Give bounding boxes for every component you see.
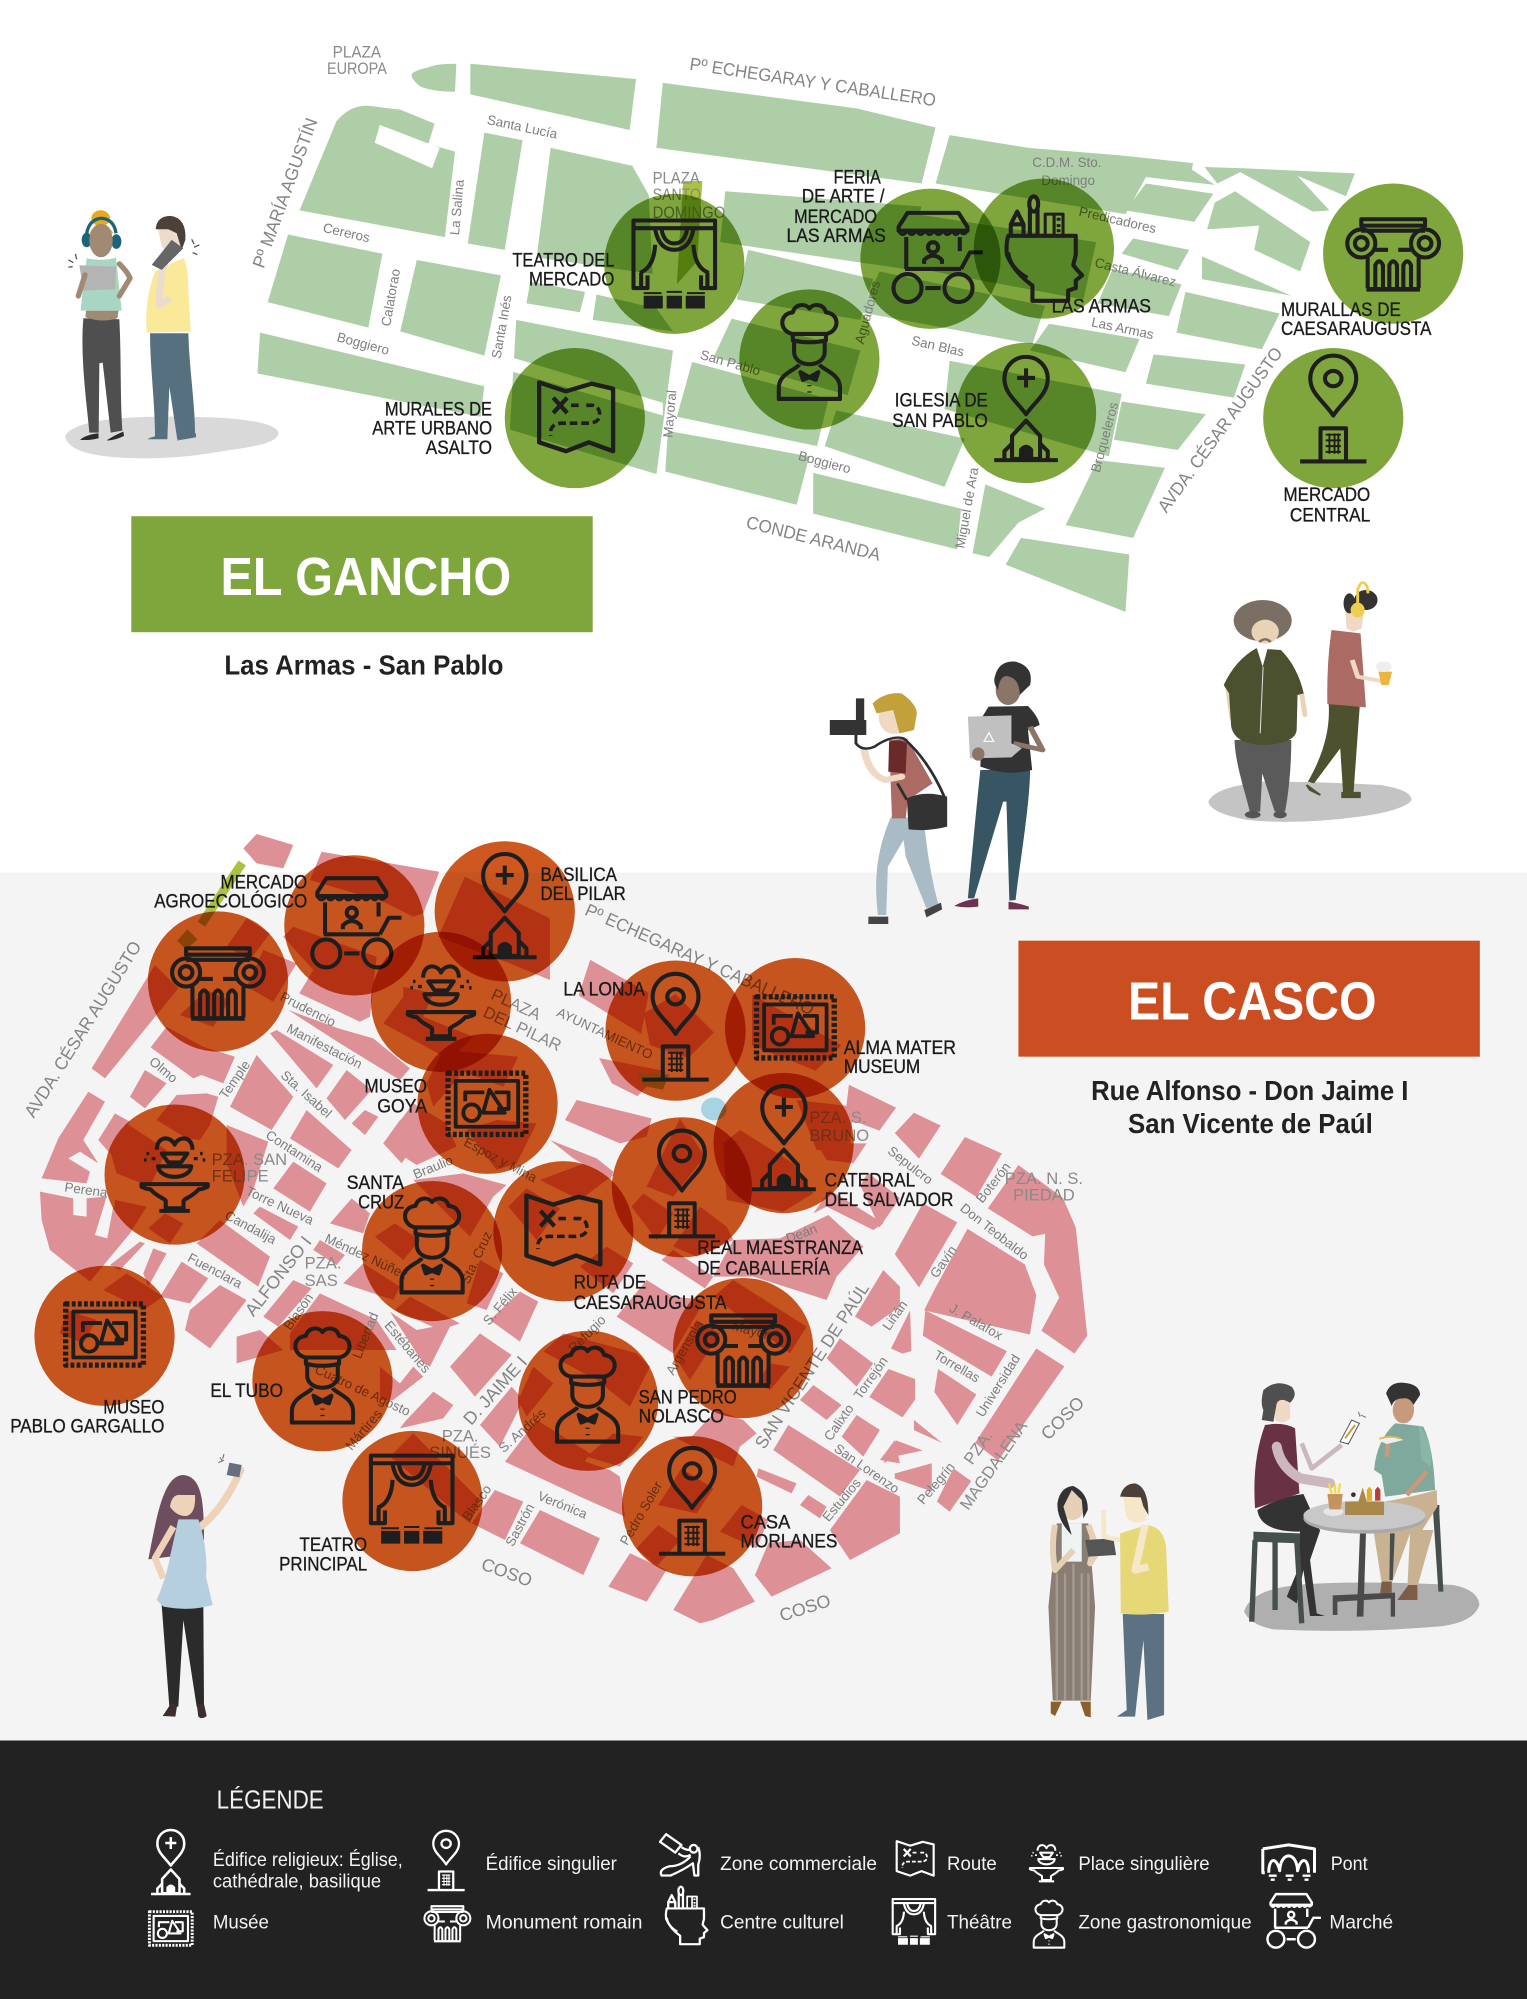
street labels: El Casco: PZA.	[442, 1427, 479, 1446]
illustration: two people eating at a table	[1244, 1383, 1479, 1631]
street labels: El Casco: Deán	[784, 1221, 819, 1246]
street labels: El Casco: S. Félix	[480, 1284, 520, 1328]
legend: religious building: cathédrale, basilique	[213, 1871, 381, 1893]
marker: Mercado Central	[1263, 348, 1403, 488]
labels: El Casco: DEL PILAR	[540, 884, 626, 905]
street labels: El Gancho: San Blas	[910, 333, 966, 360]
labels: El Casco: GOYA	[377, 1097, 427, 1118]
map: El Gancho plaza accent	[677, 181, 702, 284]
street labels: El Casco: Pedro Soler	[617, 1478, 665, 1548]
labels: El Casco: LA LONJA	[563, 979, 645, 1000]
labels: El Casco: CAESARAUGUSTA	[574, 1293, 727, 1314]
street labels: El Casco: PIEDAD	[1013, 1186, 1075, 1205]
labels: El Casco: CASA	[741, 1512, 791, 1533]
marker: Teatro Principal	[342, 1431, 483, 1571]
map: El Casco blocks, north-west	[40, 834, 550, 1363]
street labels: El Casco: Argensola	[663, 1317, 706, 1377]
street labels: El Gancho: Broqueleros	[1088, 400, 1121, 474]
marker: Basilica del Pilar	[435, 841, 575, 981]
marker: Alma Mater Museum	[725, 958, 865, 1098]
legend: singular building: Édifice singulier	[486, 1852, 617, 1875]
legend: theatre	[893, 1899, 1012, 1945]
labels: El Gancho: MURALES DE	[385, 400, 492, 421]
labels: El Casco: REAL MAESTRANZA	[697, 1238, 863, 1259]
street labels: El Casco: SINUÉS	[429, 1443, 491, 1462]
street labels: El Casco	[20, 900, 1088, 1626]
street labels: El Casco: FELIPE	[212, 1167, 269, 1186]
street labels: El Casco: Torre Nueva	[244, 1183, 316, 1228]
street labels: El Casco: Verónica	[536, 1488, 590, 1522]
marker: San Pedro Nolasco chef	[518, 1331, 658, 1471]
street labels: El Gancho: Pº ECHEGARAY Y CABALLERO	[688, 54, 937, 110]
marker: Iglesia de San Pablo	[956, 343, 1096, 483]
marker: La Lonja	[605, 961, 746, 1101]
street labels: El Casco: Pº ECHEGARAY Y CABALLERO	[582, 900, 817, 1019]
legend: singular building	[428, 1831, 617, 1890]
legend: roman monument	[424, 1906, 642, 1941]
title box: El Casco	[1018, 941, 1480, 1057]
title box: El Gancho	[131, 516, 593, 632]
street labels: El Casco: D. JAIME I	[459, 1352, 531, 1429]
marker: Plaza San Felipe fountain	[105, 1104, 245, 1245]
street labels: El Casco: BRUNO	[809, 1126, 869, 1145]
marker: Casa Morlanes	[622, 1436, 762, 1576]
marker: Santa Cruz chef	[362, 1181, 502, 1321]
street labels: El Gancho: PLAZA	[333, 42, 382, 61]
street labels: El Casco: Estébanes	[381, 1318, 434, 1376]
map: El Gancho white street cuts	[375, 125, 663, 416]
street labels: El Gancho: Aguadores	[852, 279, 883, 346]
street labels: El Casco: PZA. S.	[809, 1108, 866, 1127]
legend: route: Route	[947, 1853, 997, 1875]
street labels: El Gancho: Domingo	[1041, 173, 1095, 188]
street labels: El Gancho: CONDE ARANDA	[744, 512, 883, 565]
street labels: El Casco: Universidad	[973, 1352, 1023, 1420]
labels: El Casco: BASILICA	[540, 865, 617, 886]
marker: Mercado Agroecológico column	[148, 911, 288, 1052]
street labels: El Casco: J. Palafox	[947, 1301, 1006, 1343]
illustration: person with laptop	[954, 662, 1043, 909]
legend: roman monument: Monument romain	[486, 1912, 642, 1934]
street labels: El Casco: Sepulcro	[885, 1143, 936, 1187]
labels: El Casco: DE CABALLERÍA	[697, 1259, 830, 1280]
labels: El Casco: ALMA MATER	[844, 1038, 956, 1059]
street labels: El Casco: PZA. SAN	[212, 1150, 287, 1169]
street labels: El Casco: Perena	[64, 1179, 109, 1200]
street labels: El Gancho: Santa Lucía	[486, 112, 559, 142]
marker: Museo Pablo Gargallo	[34, 1266, 175, 1406]
street labels: El Casco: S. Andrés	[496, 1405, 549, 1456]
marker: Murallas de Caesaraugusta	[1323, 184, 1463, 324]
labels: El Casco: CATEDRAL	[825, 1171, 915, 1192]
marker: El Tubo chef	[252, 1311, 393, 1451]
street labels: El Casco: Méndez Núñez	[323, 1231, 411, 1282]
street labels: El Casco: AVDA. CÉSAR AUGUSTO	[20, 937, 145, 1121]
street labels: El Casco: Boterón	[973, 1160, 1014, 1206]
marker: Teatro del Mercado	[604, 194, 744, 334]
street labels: El Casco: Blasco	[459, 1482, 495, 1524]
street labels: El Casco: Blasón	[281, 1291, 316, 1333]
marker: Real Maestranza	[612, 1117, 752, 1257]
legend: market	[1267, 1894, 1393, 1948]
street labels: El Casco: Gavín	[927, 1243, 960, 1281]
street labels: El Casco: Mártires	[342, 1406, 385, 1453]
labels: El Casco: CRUZ	[358, 1192, 404, 1213]
labels: El Gancho: TEATRO DEL	[512, 250, 614, 271]
labels: El Casco: RUTA DE	[574, 1273, 646, 1294]
labels: El Gancho: FERIA	[834, 168, 881, 189]
labels: El Casco: MUSEO	[103, 1398, 164, 1419]
map: El Casco blocks, south-east	[380, 1100, 900, 1623]
labels: El Casco: EL TUBO	[210, 1381, 283, 1402]
street labels: El Gancho: Boggiero	[797, 448, 852, 476]
street labels: El Gancho: Predicadores	[1077, 204, 1158, 236]
subtitle: El Gancho: Las Armas - San Pablo	[224, 649, 503, 680]
legend: route	[897, 1841, 997, 1876]
street labels: El Casco: Torrejón	[851, 1354, 891, 1402]
labels: El Casco: MUSEUM	[844, 1057, 920, 1078]
street labels: El Gancho: Casta Álvarez	[1093, 255, 1178, 290]
labels: El Gancho: LAS ARMAS	[786, 226, 886, 247]
map: El Casco plaza accents	[177, 863, 727, 1120]
street labels: El Gancho: EUROPA	[327, 59, 388, 78]
labels: El Gancho: DE ARTE /	[802, 187, 885, 208]
street labels: El Gancho: Calatorao	[378, 268, 403, 327]
labels: El Gancho: MERCADO	[529, 270, 614, 291]
street labels: El Casco: Candalija	[223, 1208, 279, 1247]
street labels: El Casco: Pelegrín	[914, 1459, 958, 1507]
street labels: El Casco: Calixto	[821, 1401, 857, 1444]
street labels: El Casco: Don Teobaldo	[957, 1200, 1031, 1263]
street labels: El Casco: Refugio	[565, 1312, 609, 1356]
street labels: El Casco: Liñán	[879, 1298, 910, 1333]
street labels: El Casco: PLAZA	[488, 985, 545, 1025]
street labels: El Gancho: Boggiero	[335, 329, 391, 358]
street labels: El Gancho: PLAZA	[653, 169, 701, 188]
street labels: El Casco: Torrellas	[931, 1347, 983, 1386]
street labels: El Gancho: La Salina	[447, 178, 467, 236]
labels: El Casco: SANTA	[347, 1173, 404, 1194]
marker: Roman column	[673, 1278, 813, 1418]
illustration: two people with tablet and phone	[65, 210, 278, 458]
street labels: El Casco: Fuenclara	[185, 1250, 245, 1291]
street labels: El Gancho: San Pablo	[699, 347, 762, 378]
street labels: El Casco: Manifestación	[284, 1021, 365, 1072]
marker: Plaza del Pilar fountain	[371, 932, 511, 1072]
labels: El Gancho: MERCADO	[794, 207, 877, 228]
street labels: El Casco: Sastrón	[502, 1501, 537, 1549]
street labels: El Casco: Braulio	[411, 1152, 455, 1182]
legend: singular square: Place singulière	[1078, 1853, 1210, 1875]
map: El Gancho street blocks	[257, 64, 1355, 612]
title box: El Casco: EL CASCO	[1128, 973, 1377, 1032]
street labels: El Gancho: C.D.M. Sto.	[1032, 155, 1101, 170]
street labels: El Gancho	[249, 42, 1287, 565]
street labels: El Casco: Mayor	[731, 1318, 771, 1342]
marker: Las Armas	[974, 178, 1114, 319]
street labels: El Casco: Espoz y Mina	[462, 1134, 540, 1185]
labels: El Gancho: CENTRAL	[1290, 505, 1370, 526]
labels: El Gancho: ARTE URBANO	[372, 419, 492, 440]
legend: market: Marché	[1329, 1912, 1393, 1934]
legend: cultural centre: Centre culturel	[720, 1912, 844, 1934]
legend: religious building: Édifice religieux: Église,	[213, 1848, 403, 1871]
subtitle: El Casco	[1091, 1075, 1408, 1139]
labels: El Gancho: IGLESIA DE	[895, 391, 988, 412]
subtitle: El Casco: San Vicente de Paúl	[1128, 1108, 1373, 1139]
street labels: El Casco: Prudencio	[278, 989, 338, 1030]
labels: El Casco	[10, 865, 956, 1575]
street labels: El Casco: Sta. Isabel	[278, 1067, 335, 1121]
title box: El Gancho: EL GANCHO	[221, 548, 511, 607]
street labels: El Gancho: Santa Inés	[489, 294, 515, 360]
street labels: El Gancho: SANTO	[653, 185, 701, 204]
street labels: El Casco: SAN VICENTE DE PAÚL	[750, 1278, 873, 1452]
street labels: El Casco: ALFONSO I	[241, 1232, 316, 1320]
legend: museum	[149, 1912, 269, 1945]
legend: religious building	[151, 1830, 403, 1894]
map: El Casco blocks, east	[579, 960, 1087, 1512]
street labels: El Casco: PZA.	[960, 1427, 997, 1468]
legend: museum: Musée	[213, 1912, 269, 1934]
street labels: El Casco: MAGDALENA	[956, 1416, 1032, 1513]
street labels: El Casco: Cuatro de Agosto	[313, 1362, 413, 1419]
legend: heading: LÉGENDE	[217, 1786, 324, 1815]
street labels: El Gancho: Las Armas	[1090, 314, 1155, 342]
labels: El Gancho	[372, 168, 1432, 526]
legend: singular square	[1030, 1845, 1210, 1881]
legend: gastronomy	[1033, 1901, 1252, 1948]
street labels: El Gancho: Cereros	[322, 220, 372, 245]
illustration: woman taking a selfie	[148, 1454, 242, 1718]
illustration: photographer	[830, 693, 947, 924]
labels: El Casco: TEATRO	[300, 1535, 367, 1556]
street labels: El Casco: PZA.	[305, 1253, 341, 1272]
street labels: El Casco: Sta. Cruz	[458, 1229, 495, 1286]
street labels: El Gancho: Pº MARÍA AGUSTÍN	[249, 115, 321, 271]
labels: El Casco: NOLASCO	[639, 1406, 724, 1427]
labels: El Casco: MORLANES	[741, 1531, 837, 1552]
marker: Murales	[505, 348, 645, 488]
street labels: El Gancho: AVDA. CÉSAR AUGUSTO	[1154, 343, 1287, 516]
street labels: El Casco: Olmo	[146, 1054, 181, 1086]
street labels: El Casco: Contamina	[263, 1127, 326, 1175]
labels: El Gancho: MERCADO	[1284, 485, 1370, 506]
street labels: El Casco: COSO	[777, 1590, 833, 1626]
legend: cultural centre	[666, 1887, 844, 1944]
marker: Ruta de Caesaraugusta	[493, 1161, 633, 1301]
street labels: El Casco: AYUNTAMIENTO	[554, 1005, 655, 1062]
legend: shopping area: Zone commerciale	[720, 1853, 877, 1875]
illustration: man with afro and man walking	[1208, 582, 1412, 822]
illustration: woman in striped dress and man with tablet	[1048, 1483, 1169, 1720]
labels: El Casco: SAN PEDRO	[639, 1387, 737, 1408]
marker: Feria de Arte	[860, 189, 1001, 329]
labels: El Casco: AGROECOLÓGICO	[154, 891, 307, 913]
street labels: El Gancho: Miguel de Ara	[952, 466, 981, 549]
labels: El Casco: PABLO GARGALLO	[10, 1417, 164, 1438]
legend: gastronomy: Zone gastronomique	[1078, 1912, 1252, 1934]
labels: El Gancho: SAN PABLO	[892, 411, 988, 432]
labels: El Gancho: ASALTO	[426, 438, 492, 459]
legend: bridge: Pont	[1331, 1853, 1368, 1875]
street labels: El Gancho: DOMINGO	[653, 203, 725, 222]
legend: bridge	[1263, 1845, 1368, 1880]
labels: El Gancho: LAS ARMAS	[1052, 296, 1151, 317]
marker: Museo Goya	[417, 1034, 558, 1174]
labels: El Casco: PRINCIPAL	[279, 1554, 367, 1575]
street labels: El Casco: PZA. N. S.	[1005, 1169, 1083, 1188]
labels: El Gancho: MURALLAS DE	[1281, 300, 1401, 321]
marker: Catedral del Salvador	[714, 1073, 854, 1213]
legend: theatre: Théâtre	[947, 1912, 1012, 1934]
street labels: El Casco: SAS	[305, 1271, 338, 1290]
marker: market cart	[284, 855, 424, 995]
labels: El Casco: MERCADO	[221, 872, 307, 893]
street labels: El Casco: Estudios	[819, 1475, 864, 1524]
street labels: El Casco: COSO	[479, 1554, 535, 1591]
labels: El Casco: MUSEO	[365, 1076, 427, 1097]
street labels: El Casco: San Lorenzo	[831, 1441, 902, 1496]
labels: El Gancho: CAESARAUGUSTA	[1281, 319, 1432, 340]
subtitle: El Casco: Rue Alfonso - Don Jaime I	[1091, 1075, 1408, 1106]
labels: El Casco: DEL SALVADOR	[825, 1190, 953, 1211]
street labels: El Gancho: Mayoral	[660, 389, 679, 438]
street labels: El Casco: Temple	[216, 1058, 253, 1102]
street labels: El Casco: Libertad	[349, 1310, 381, 1361]
marker: gastronomy chef	[739, 289, 879, 430]
street labels: El Casco: DEL PILAR	[480, 1002, 565, 1055]
street labels: El Casco: COSO	[1037, 1393, 1088, 1444]
legend: shopping area	[660, 1834, 877, 1875]
